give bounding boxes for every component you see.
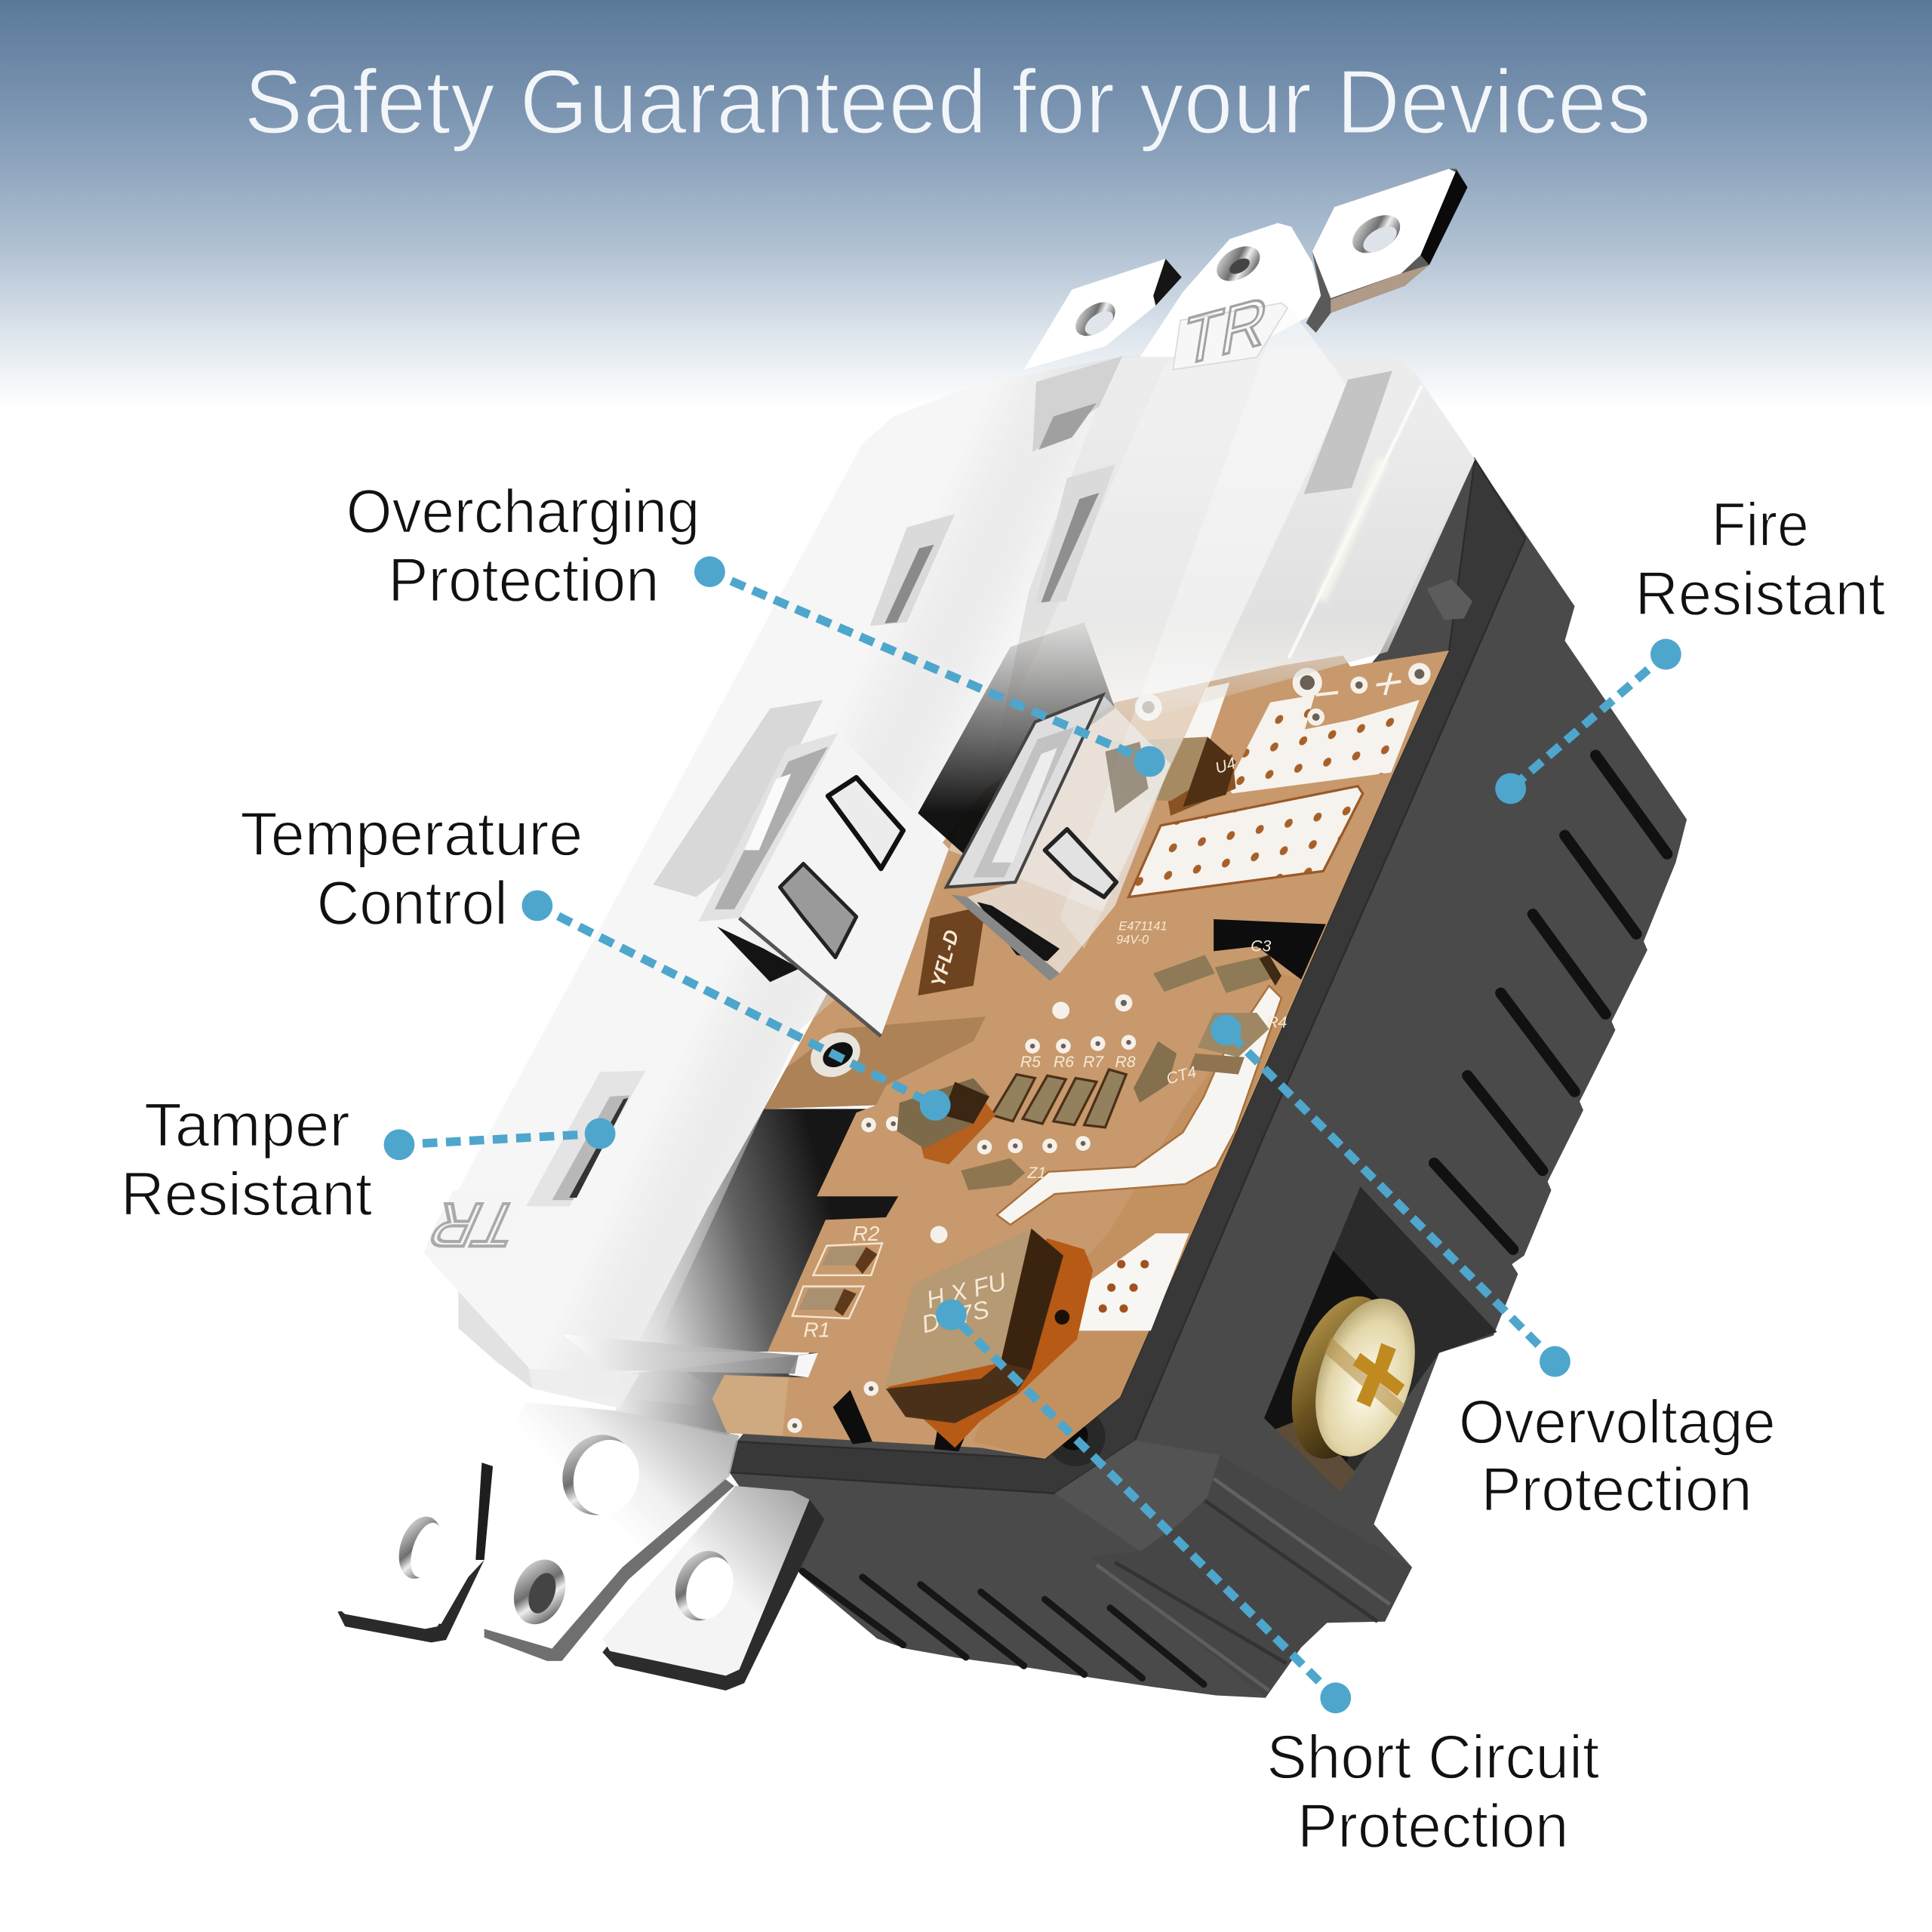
- faint hex moulding: [1427, 579, 1472, 620]
- silkscreen labels: 94V-0: [1116, 934, 1149, 947]
- chip CT4: [1134, 1041, 1177, 1103]
- chip J4: [897, 1078, 995, 1164]
- silkscreen labels: R1: [803, 1318, 830, 1341]
- callout: tamper resistant: [121, 1091, 616, 1229]
- callout: temperature control: Temperature: [240, 800, 583, 869]
- chip U4: [1109, 737, 1236, 816]
- silkscreen labels: H X FU: [924, 1267, 1009, 1314]
- silkscreen labels: U4: [1213, 755, 1238, 777]
- corner bevel: [1055, 1441, 1220, 1552]
- dark interior below board: [633, 1109, 900, 1352]
- lower board pad: [712, 1375, 789, 1435]
- upper right slot: [1035, 465, 1115, 604]
- icon: board mounting hole: [802, 1023, 869, 1086]
- transformer: [884, 1229, 1093, 1447]
- chips R1 and R2: [792, 1243, 882, 1318]
- silkscreen labels: Z1: [1027, 1164, 1046, 1182]
- callout: short circuit protection: Protection: [1297, 1792, 1568, 1860]
- silkscreen labels: [803, 755, 1287, 1341]
- perforated plate middle: [1129, 786, 1363, 897]
- internal spring streak: [1321, 458, 1383, 600]
- lower edge moulding: [458, 1291, 532, 1389]
- white power trace: [997, 986, 1281, 1225]
- callout: overcharging protection: [346, 477, 1165, 777]
- silkscreen labels: R7: [1083, 1054, 1104, 1071]
- icon: corner screw hole: [1046, 1407, 1105, 1466]
- circuit board: [712, 651, 1449, 1459]
- silkscreen labels: CT4: [1164, 1063, 1198, 1088]
- chip Z1: [961, 1158, 1025, 1190]
- lower slot: [526, 1071, 646, 1206]
- screw niche wall: [1264, 1186, 1497, 1492]
- USB port left: [653, 700, 949, 1036]
- silkscreen labels: E471141: [1118, 920, 1168, 934]
- dark upper interior through faceplate: [918, 622, 1115, 863]
- callout: overvoltage protection: [1211, 1014, 1776, 1524]
- callout: short circuit protection: Short Circuit: [1266, 1723, 1599, 1792]
- glass highlight edge: [1289, 386, 1422, 658]
- top metal mounting tabs: [1024, 169, 1467, 370]
- socket slots: [526, 356, 1122, 1206]
- icon: top centre tab: [1140, 223, 1324, 357]
- icon: top right tab: [1306, 169, 1467, 333]
- recess behind strip: [1303, 371, 1392, 494]
- silkscreen labels: R4: [1266, 1014, 1287, 1032]
- white pad with slot: [1182, 682, 1229, 743]
- silkscreen labels: R6: [1054, 1054, 1074, 1071]
- spring clip lower: [780, 863, 857, 958]
- brown upper band: [764, 1017, 986, 1109]
- TR marking lower: TR: [418, 1190, 531, 1259]
- silkscreen labels: YFL-D: [926, 928, 963, 989]
- upper left slot: [870, 514, 955, 626]
- perforated plate top: [1227, 695, 1420, 793]
- callout: fire resistant: Fire: [1712, 491, 1809, 559]
- housing rim: [730, 460, 1525, 1494]
- callout: temperature control: Control: [317, 869, 508, 937]
- black lower slot: [717, 927, 800, 982]
- title: Safety Guaranteed for your Devices: [244, 51, 1651, 152]
- silkscreen labels: R2: [853, 1222, 880, 1245]
- resistors R5 to R8: [992, 1069, 1126, 1128]
- icon: bottom left tab: [337, 1457, 493, 1642]
- dark housing: [730, 460, 1687, 1698]
- icon: top left tab: [1024, 259, 1182, 370]
- black lower slot: [977, 902, 1060, 961]
- side vents: [1434, 755, 1667, 1250]
- callout: overcharging protection: Protection: [388, 546, 659, 615]
- silkscreen labels: R5: [1020, 1054, 1041, 1071]
- callout: overvoltage protection: Protection: [1481, 1456, 1752, 1524]
- black board cutouts: [833, 919, 1326, 1451]
- callout: tamper resistant: Tamper: [144, 1091, 350, 1159]
- dark band behind plate foot: [616, 1353, 818, 1435]
- plus and minus silkscreen: [1316, 672, 1401, 695]
- callout: temperature control: [240, 800, 951, 1121]
- icon: bottom right tab: [602, 1486, 824, 1690]
- callout: overvoltage protection: Overvoltage: [1459, 1388, 1776, 1457]
- callout: fire resistant: Resistant: [1635, 560, 1885, 629]
- bottom metal mounting tabs: [337, 1402, 824, 1690]
- spring clip: [1044, 829, 1116, 897]
- USB port right: [946, 695, 1171, 981]
- white translucent faceplate: [424, 300, 1475, 1411]
- chips C3: [1153, 955, 1281, 993]
- white gap: [789, 1353, 818, 1377]
- silkscreen labels: D0 7S: [918, 1294, 992, 1338]
- callout: fire resistant: [1495, 491, 1885, 804]
- spring clip upper: [828, 777, 903, 869]
- icon: brass terminal screw: [1274, 1284, 1432, 1471]
- callout: short circuit protection: [936, 1300, 1599, 1860]
- bottom vents: [802, 1571, 1204, 1684]
- white perforated block: [1077, 1233, 1189, 1331]
- lower white bar: [563, 1334, 798, 1374]
- dark marked block: [918, 906, 986, 995]
- ridged base: [1091, 1455, 1412, 1698]
- raised centre strip: [949, 300, 1348, 912]
- screw niche interior: [1264, 1251, 1386, 1492]
- through holes: [787, 663, 1431, 1433]
- silkscreen labels: C3: [1251, 937, 1271, 955]
- silkscreen labels: R8: [1115, 1054, 1136, 1071]
- chips R4: [1189, 1013, 1269, 1075]
- icon: bottom centre tab: [485, 1402, 740, 1661]
- TR marking top: TR: [1178, 281, 1273, 380]
- ground hole: [1032, 356, 1122, 452]
- callout: overcharging protection: Overcharging: [346, 477, 700, 546]
- callout: tamper resistant: Resistant: [121, 1160, 372, 1229]
